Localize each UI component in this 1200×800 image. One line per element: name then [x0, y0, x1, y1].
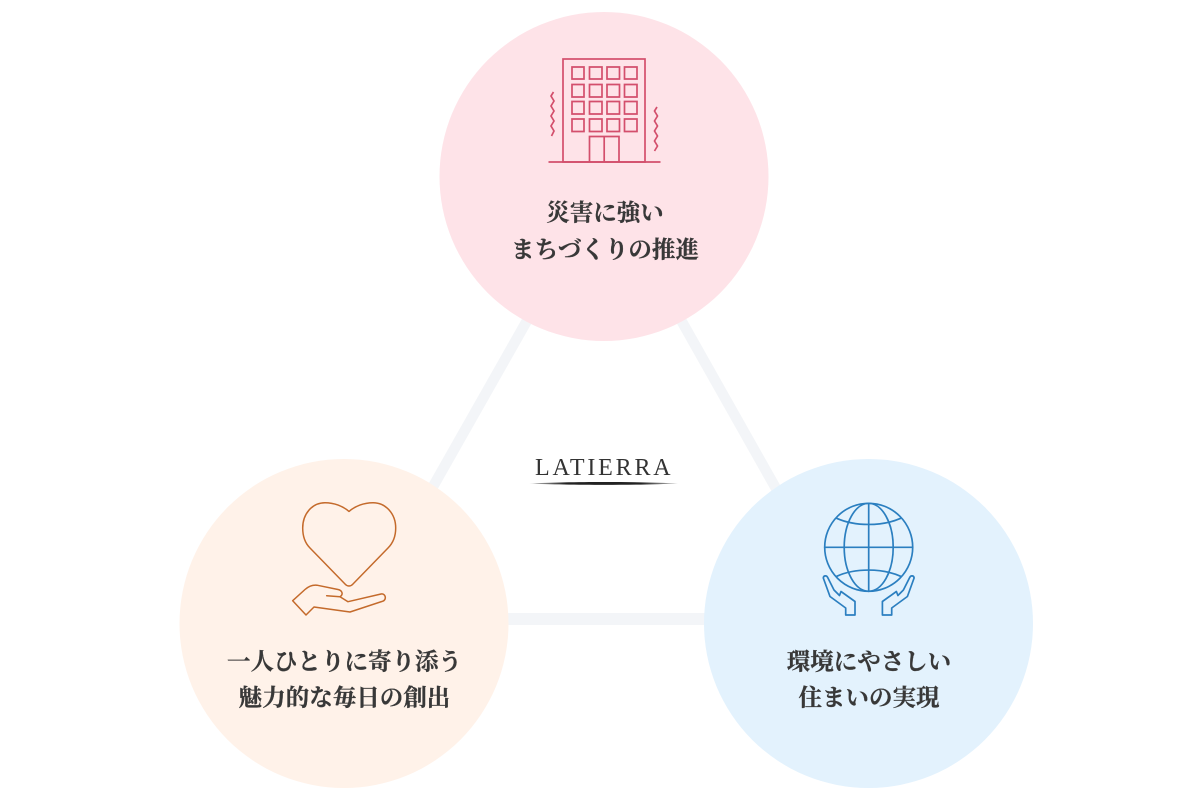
heading: disaster-resilient town: 災害に強い — [546, 200, 664, 226]
circle: peach — [180, 459, 508, 788]
panel: heartfelt daily life — [180, 459, 508, 788]
heading: heartfelt daily life — [227, 648, 462, 712]
heading: heartfelt daily life: 一人ひとりに寄り添う — [227, 648, 462, 676]
icon: heart on hand — [293, 503, 396, 615]
logo: LATIERRA: LATIERRA — [535, 455, 673, 481]
icon: building with tremors — [548, 59, 660, 162]
circle: light blue — [704, 459, 1033, 788]
triangle connector lines — [344, 300, 868, 619]
panel: eco-friendly living — [704, 459, 1033, 788]
heading: eco-friendly living: 住まいの実現 — [798, 684, 940, 712]
heading: disaster-resilient town: まちづくりの推進 — [511, 236, 699, 264]
heading: eco-friendly living — [787, 648, 951, 712]
heading: disaster-resilient town — [511, 200, 699, 264]
heading: heartfelt daily life: 魅力的な毎日の創出 — [239, 684, 450, 712]
heading: eco-friendly living: 環境にやさしい — [787, 648, 951, 676]
panel: disaster-resilient town — [440, 12, 768, 341]
icon: globe held by hands — [823, 503, 914, 615]
circle: pink — [440, 12, 768, 341]
